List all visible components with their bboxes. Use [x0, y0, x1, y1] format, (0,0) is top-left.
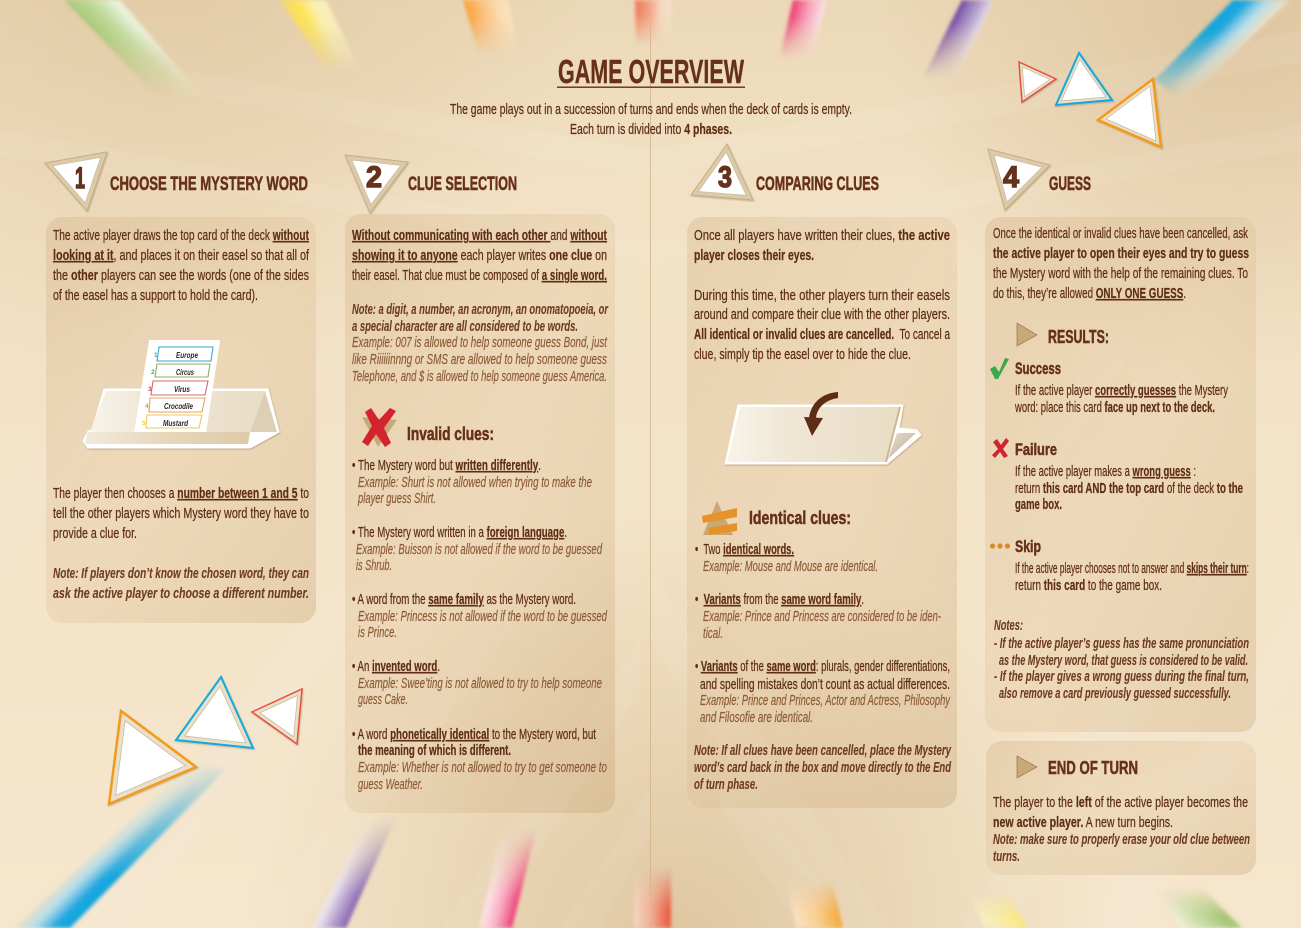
tipped easel with arrow	[725, 392, 921, 464]
intro text	[450, 102, 852, 138]
panel: step 4 guess	[985, 149, 1256, 732]
easel with word card: 5	[142, 420, 146, 427]
step 1 heading: CHOOSE THE MYSTERY WORD	[110, 174, 308, 195]
easel with word card: Europe	[176, 350, 198, 360]
step 3 badge	[691, 144, 753, 200]
step 1 number text: tell the other players which Mystery word they have to	[53, 506, 309, 522]
success text: If the active player correctly guesses the Mystery	[1015, 383, 1228, 399]
icon: identical clues	[702, 501, 737, 535]
invalid clues list: is Prince.	[358, 625, 397, 641]
step 3 text	[694, 228, 951, 363]
identical clues list: tical.	[703, 626, 723, 642]
invalid clues list: guess Cake.	[358, 692, 408, 708]
step 3 heading: COMPARING CLUES	[756, 174, 879, 195]
invalid clues heading: Invalid clues:	[407, 424, 494, 444]
step 3 text: clue, simply tip the easel over to hide the clue.	[694, 347, 911, 363]
invalid clues list: Example: Whether is not allowed to try to get someone to	[358, 760, 607, 776]
easel with word card: Circus	[176, 367, 194, 377]
invalid clues list: guess Weather.	[358, 777, 423, 793]
invalid clues list: Example: Buisson is not allowed if the word to be guessed	[356, 542, 603, 558]
results heading: RESULTS:	[1048, 327, 1109, 347]
step 1 note: ask the active player to choose a different number.	[53, 586, 309, 602]
step 1 intro text	[53, 228, 310, 304]
easel with word card: Crocodile	[164, 401, 193, 411]
panel: step 2 clue selection	[345, 155, 615, 813]
icon: end of turn arrow	[1017, 756, 1037, 778]
skip heading: Skip	[1015, 537, 1041, 556]
step 4 notes	[994, 618, 1249, 702]
step 1 number text	[53, 486, 309, 542]
invalid clues list: is Shrub.	[356, 558, 392, 574]
step 2 intro text: Without communicating with each other and without	[352, 228, 607, 244]
step 3 badge: 3	[718, 161, 732, 194]
success text	[1014, 383, 1228, 416]
step 2 badge	[345, 155, 408, 213]
decorative triangles bottom left	[109, 677, 302, 804]
icon: failure cross	[992, 438, 1009, 458]
step 4 badge: 4	[1003, 161, 1019, 194]
end of turn text: The player to the left of the active player becomes the	[993, 795, 1248, 811]
intro text: Each turn is divided into 4 phases.	[570, 122, 732, 138]
icon: success check	[990, 358, 1009, 379]
identical clues list: and spelling mistakes don’t count as actual differences.	[700, 677, 950, 693]
step 2 note and example	[352, 302, 609, 385]
easel with word card	[83, 341, 279, 448]
success heading: Success	[1015, 359, 1061, 378]
invalid clues list: • An invented word.	[352, 659, 440, 675]
step 2 intro text: showing it to anyone each player writes one clue on	[352, 248, 607, 264]
identical clues list: • Two identical words.	[695, 542, 794, 558]
failure text: game box.	[1015, 497, 1062, 513]
panel: step 3 comparing clues	[687, 144, 957, 808]
step 2 heading: CLUE SELECTION	[408, 174, 517, 195]
step 1 badge	[45, 152, 107, 211]
identical clues list: and Filosofie are identical.	[700, 710, 813, 726]
step 2 intro text	[352, 228, 607, 284]
failure text: If the active player makes a wrong guess :	[1015, 464, 1196, 480]
invalid clues list: player guess Shirt.	[357, 491, 436, 507]
step 3 note: Note: If all clues have been cancelled, place the Mystery	[694, 743, 952, 759]
step 2 badge: 2	[366, 161, 382, 194]
identical clues list: Example: Mouse and Mouse are identical.	[703, 559, 878, 575]
step 4 notes: Notes:	[994, 618, 1023, 634]
icon: invalid red cross	[362, 408, 397, 447]
step 4 badge	[988, 149, 1050, 210]
step 3 text: During this time, the other players turn their easels	[694, 288, 950, 304]
panel: step 1 choose the mystery word	[45, 152, 316, 623]
icon: skip dots	[990, 543, 1010, 549]
end of turn text: turns.	[993, 849, 1020, 865]
step 3 text: around and compare their clue with the other players.	[694, 307, 950, 323]
easel with word card: Virus	[174, 384, 190, 394]
step 2 note and example: Example: 007 is allowed to help someone guess Bond, just	[352, 335, 608, 351]
invalid clues list: Example: Shurt is not allowed when trying to make the	[358, 475, 592, 491]
easel with word card: 4	[145, 403, 149, 410]
success text: word: place this card face up next to the deck.	[1014, 400, 1215, 416]
step 3 text: Once all players have written their clues, the active	[694, 228, 950, 244]
invalid clues list: • The Mystery word written in a foreign language.	[352, 525, 567, 541]
identical clues list	[695, 542, 950, 726]
step 3 text: player closes their eyes.	[694, 248, 814, 264]
skip text: return this card to the game box.	[1015, 578, 1162, 594]
title: GAME OVERVIEW	[558, 53, 745, 90]
step 2 intro text: their easel. That clue must be composed of a single word.	[352, 268, 607, 284]
invalid clues list: • A word from the same family as the Mystery word.	[352, 592, 576, 608]
identical clues list: • Variants of the same word: plurals, gender differentiations,	[695, 659, 950, 675]
end of turn text	[993, 795, 1250, 865]
step 1 intro text: of the easel has a support to hold the card).	[53, 288, 258, 304]
end of turn heading: END OF TURN	[1048, 758, 1138, 778]
step 2 note and example: a special character are all considered to be words.	[352, 319, 578, 335]
decorative triangles top right	[1019, 53, 1161, 147]
step 1 badge: 1	[75, 162, 85, 195]
step 3 note: word’s card back in the box and move directly to the End	[694, 760, 952, 776]
end of turn text: new active player. A new turn begins.	[993, 815, 1173, 831]
identical clues list: • Variants from the same word family.	[695, 592, 864, 608]
step 4 intro text: do this, they’re allowed ONLY ONE GUESS.	[993, 286, 1186, 302]
step 1 note: Note: If players don’t know the chosen word, they can	[53, 566, 309, 582]
step 3 note: of turn phase.	[694, 777, 758, 793]
identical clues heading: Identical clues:	[749, 508, 851, 528]
failure text	[1015, 464, 1243, 513]
step 4 intro text	[993, 226, 1249, 302]
step 1 note	[53, 566, 309, 602]
step 1 number text: provide a clue for.	[53, 526, 137, 542]
invalid clues list: Example: Princess is not allowed if the word to be guessed	[358, 609, 608, 625]
step 1 intro text: the other players can see the words (one of the sides	[53, 268, 309, 284]
step 4 heading: GUESS	[1049, 174, 1091, 195]
invalid clues list: • The Mystery word but written differently.	[352, 458, 541, 474]
invalid clues list: the meaning of which is different.	[358, 743, 511, 759]
step 2 note and example: like Riiiiiinnng or SMS are allowed to help someone guess	[352, 352, 607, 368]
step 1 number text: The player then chooses a number between 1 and 5 to	[53, 486, 309, 502]
invalid clues list: • A word phonetically identical to the Mystery word, but	[352, 727, 596, 743]
identical clues list: Example: Prince and Princes, Actor and Actress, Philosophy	[700, 693, 950, 709]
step 2 note and example: Note: a digit, a number, an acronym, an onomatopoeia, or	[352, 302, 609, 318]
step 3 note	[694, 743, 952, 793]
step 1 intro text: The active player draws the top card of the deck without	[53, 228, 309, 244]
invalid clues list	[352, 458, 608, 793]
easel with word card: 1	[154, 352, 158, 359]
step 3 text: All identical or invalid clues are cancelled. To cancel a	[694, 327, 951, 343]
easel with word card: 3	[148, 386, 152, 393]
easel with word card: 2	[151, 369, 155, 376]
failure text: return this card AND the top card of the deck to the	[1015, 481, 1243, 497]
failure heading: Failure	[1015, 440, 1057, 459]
step 2 note and example: Telephone, and $ is allowed to help someone guess America.	[352, 369, 607, 385]
panel: end of turn	[986, 741, 1256, 875]
intro text: The game plays out in a succession of turns and ends when the deck of cards is empty.	[450, 102, 852, 118]
step 1 intro text: looking at it, and places it on their easel so that all of	[53, 248, 310, 264]
skip text	[1015, 561, 1249, 594]
identical clues list: Example: Prince and Princess are considered to be iden-	[703, 609, 941, 625]
icon: results arrow	[1017, 323, 1037, 346]
easel with word card: Mustard	[163, 418, 189, 428]
invalid clues list: Example: Swee’ting is not allowed to try to help someone	[358, 676, 602, 692]
